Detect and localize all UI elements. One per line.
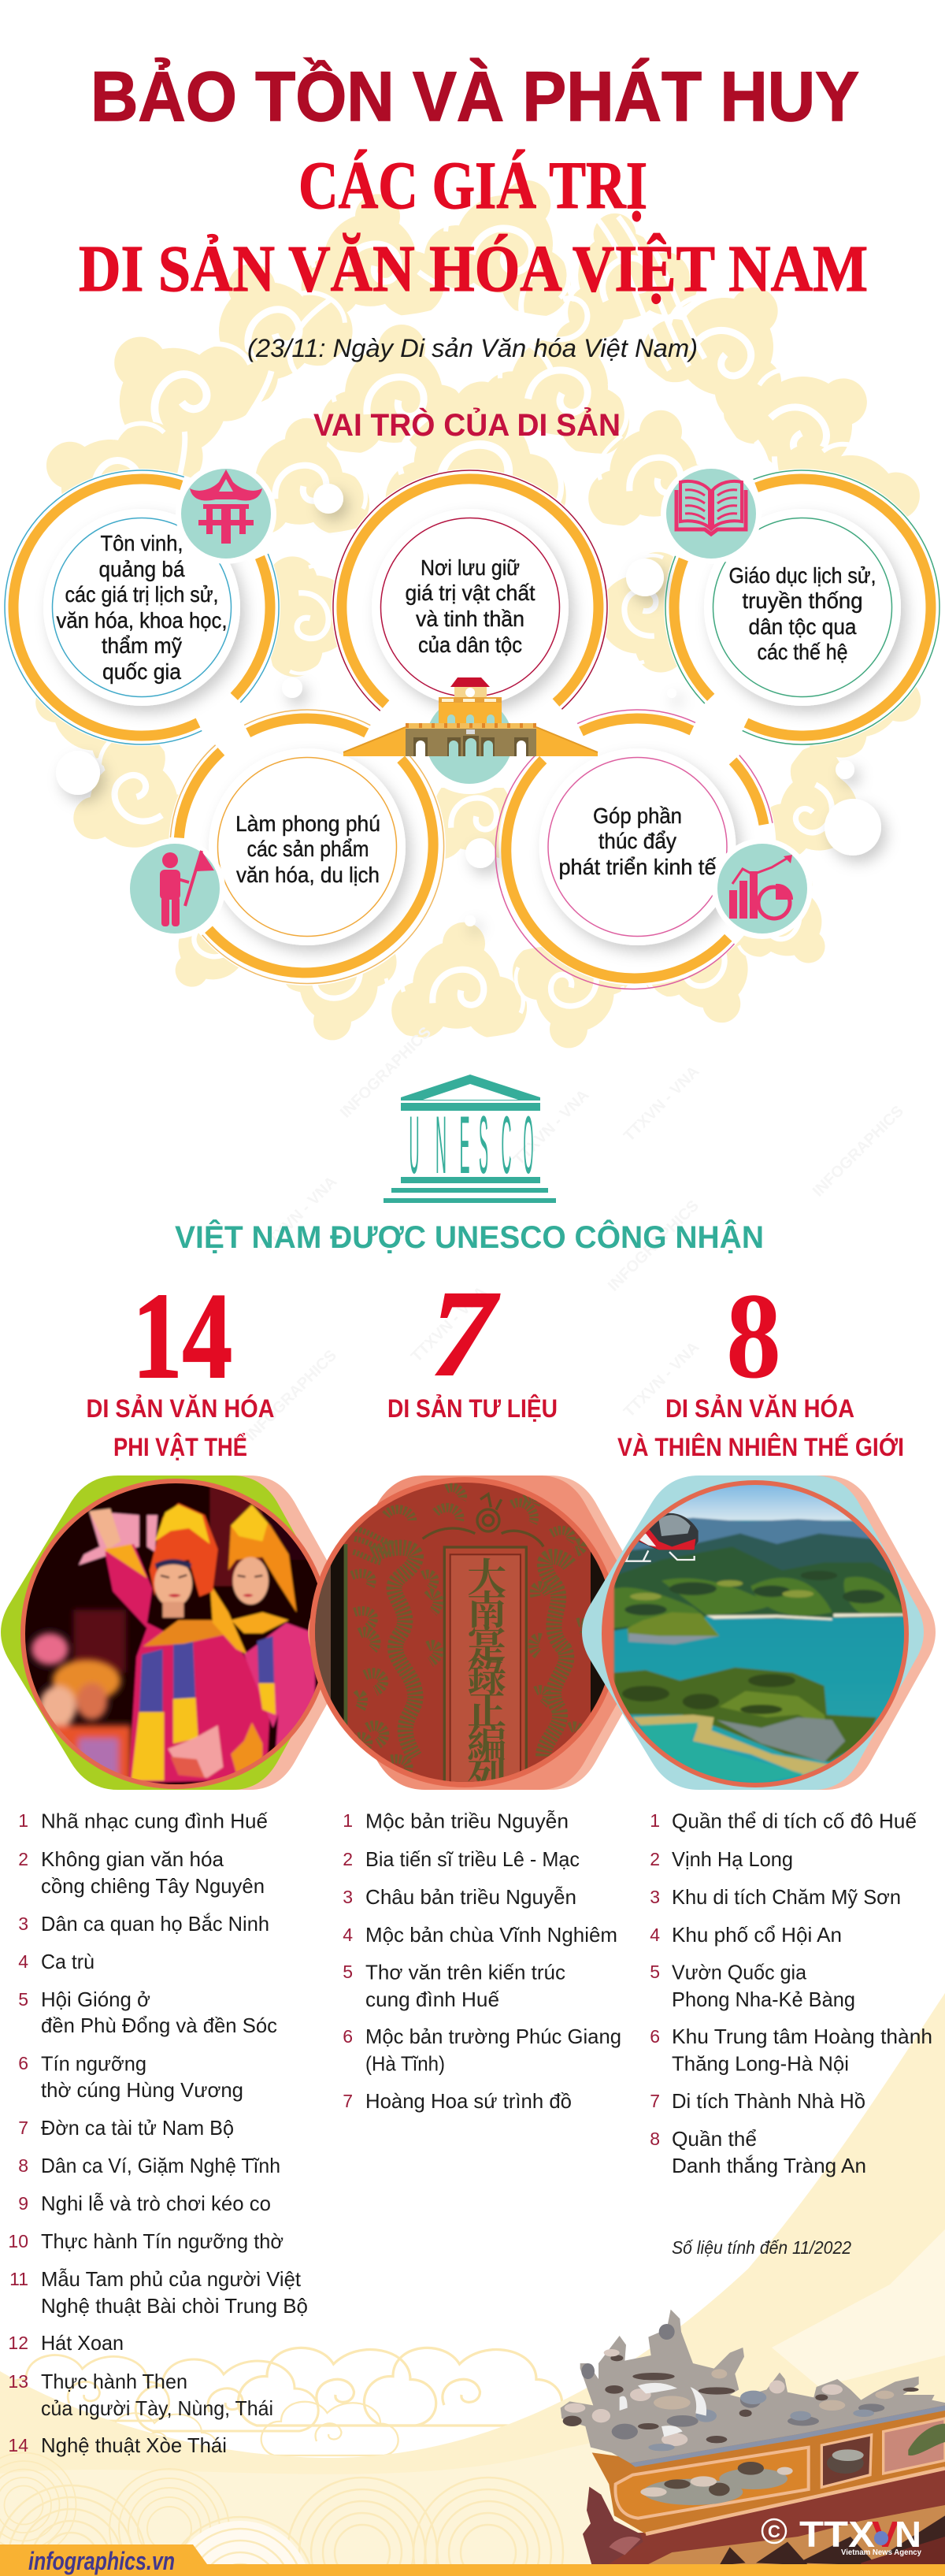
text: role 1: văn hóa, khoa học, [57, 608, 227, 633]
watermarks: TTXVN - VNA [621, 1338, 702, 1421]
list: 14 intangible heritage items: 4 [18, 1951, 28, 1972]
title line 2: CÁC GIÁ TRỊ [298, 147, 647, 223]
UNESCO logo: C [501, 1100, 512, 1191]
text: role 5: thúc đẩy [598, 829, 676, 853]
list: 8 world heritage items: Thăng Long-Hà Nội [672, 2051, 849, 2075]
list: 14 intangible heritage items: Nhã nhạc cung đình Huế [41, 1809, 269, 1832]
icon: growth chart [712, 838, 813, 939]
list: 7 documentary heritage items: 6 [343, 2026, 353, 2047]
list: 14 intangible heritage items [8, 1809, 308, 2457]
list: 14 intangible heritage items: Nghệ thuật Bài chòi Trung Bộ [41, 2294, 308, 2318]
list: 7 documentary heritage items: Thơ văn trên kiến trúc [365, 1960, 565, 1984]
list: 8 world heritage items: 6 [650, 2026, 660, 2047]
watermarks: INFOGRAPHICS [605, 1197, 702, 1295]
list: 8 world heritage items: 5 [650, 1962, 660, 1982]
role 4: enrich products [124, 710, 444, 983]
text: role 5: Góp phần [593, 804, 682, 828]
list: 8 world heritage items: Khu phố cổ Hội An [672, 1923, 842, 1947]
stat: 14 intangible heritages [87, 1268, 274, 1461]
stat: 7 documentary heritages: 7 [431, 1265, 500, 1401]
list: 14 intangible heritage items: Dân ca Ví, Giặm Nghệ Tĩnh [41, 2154, 280, 2177]
subtitle: (23/11: Ngày Di sản Văn hóa Việt Nam) [247, 334, 698, 362]
list: 14 intangible heritage items: 5 [18, 1989, 28, 2010]
list: 8 world heritage items: Quần thể di tích cố đô Huế [672, 1809, 917, 1832]
UNESCO logo: S [479, 1100, 488, 1191]
list: 7 documentary heritage items: 4 [343, 1925, 353, 1945]
text: role 4: các sản phẩm [247, 837, 369, 861]
list: 7 documentary heritage items: 1 [343, 1810, 353, 1831]
list: 7 documentary heritage items: Mộc bản chùa Vĩnh Nghiêm [365, 1923, 617, 1947]
role 1: honour and promote [5, 463, 279, 744]
list: 14 intangible heritage items: 12 [8, 2333, 28, 2353]
bottom background: wave and swoosh [0, 1993, 945, 2576]
text: role 4: văn hóa, du lịch [236, 863, 380, 887]
TTXVN logo: V [872, 2514, 899, 2555]
list: 14 intangible heritage items: 7 [18, 2118, 28, 2138]
list: 14 intangible heritage items: 2 [18, 1849, 28, 1869]
watermarks: INFOGRAPHICS [337, 1024, 435, 1122]
UNESCO logo: U [410, 1100, 419, 1191]
list: 7 documentary heritage items: Mộc bản trường Phúc Giang [365, 2025, 621, 2048]
list: 14 intangible heritage items: 11 [9, 2269, 28, 2289]
list: 8 world heritage items: Khu Trung tâm Hoàng thành [672, 2025, 932, 2048]
text: role 1: thẩm mỹ [102, 633, 182, 658]
list: 8 world heritage items: Quần thể [672, 2127, 757, 2151]
list: 8 world heritage items [650, 1809, 932, 2177]
icon: Hanoi flag tower and citadel gate [343, 677, 598, 784]
section heading: roles of heritage: VAI TRÒ CỦA DI SẢN [313, 406, 621, 443]
UNESCO logo: O [523, 1100, 534, 1191]
stat: 7 documentary heritages: DI SẢN TƯ LIỆU [387, 1394, 558, 1423]
text: role 3 [729, 563, 876, 664]
watermarks [243, 1024, 907, 1445]
stat: 8 world heritages: DI SẢN VĂN HÓA [665, 1394, 854, 1423]
text: role 2: của dân tộc [418, 633, 522, 657]
TTXVN logo: TTX [799, 2514, 875, 2555]
list: 7 documentary heritage items: Châu bản triều Nguyễn [365, 1885, 576, 1909]
list: 7 documentary heritage items: Mộc bản triều Nguyễn [365, 1809, 569, 1832]
stat: 7 documentary heritages [387, 1265, 558, 1423]
list: 14 intangible heritage items: 9 [18, 2193, 28, 2214]
photo panel: documentary heritage woodblock: 南 [467, 1579, 506, 1636]
list: 14 intangible heritage items: Không gian văn hóa [41, 1847, 224, 1871]
role 5: economic development [495, 710, 813, 989]
list: 8 world heritage items: 2 [650, 1849, 660, 1869]
watermarks: TTXVN - VNA [408, 1283, 490, 1366]
list: 7 documentary heritage items [343, 1809, 621, 2113]
UNESCO logo [384, 1075, 556, 1203]
footer bar with site name [0, 2544, 945, 2576]
photo panel: documentary heritage woodblock [308, 1475, 622, 1790]
list: 14 intangible heritage items: Đờn ca tài tử Nam Bộ [41, 2116, 234, 2140]
photo panel: Ha Long Bay natural heritage [582, 1465, 945, 1796]
list: 14 intangible heritage items: Mẫu Tam phủ của người Việt [41, 2267, 302, 2291]
TTXVN logo [762, 2514, 921, 2557]
stat: 14 intangible heritages: 14 [132, 1268, 232, 1404]
stat: 14 intangible heritages: DI SẢN VĂN HÓA [87, 1394, 274, 1423]
background: dragon roundel pattern [20, 154, 943, 1049]
illustration: imperial roof with dragon ornaments [561, 2310, 945, 2566]
watermarks: INFOGRAPHICS [810, 1103, 907, 1201]
list: 14 intangible heritage items: Ca trù [41, 1950, 94, 1973]
text: role 5: phát triển kinh tế [559, 855, 717, 879]
icon: open book [661, 463, 762, 564]
title line 1: BẢO TỒN VÀ PHÁT HUY [91, 57, 859, 135]
list: 8 world heritage items: 8 [650, 2129, 660, 2149]
photo panel: documentary heritage woodblock: 編 [467, 1713, 506, 1770]
watermarks: TTXVN - VNA [258, 1173, 340, 1256]
list: 8 world heritage items: Danh thắng Tràng An [672, 2154, 866, 2177]
text: role 1: quảng bá [99, 557, 185, 581]
list: 14 intangible heritage items: Thực hành Tín ngưỡng thờ [41, 2229, 284, 2253]
TTXVN logo: Vietnam News Agency [841, 2548, 921, 2557]
stat: 14 intangible heritages: PHI VẬT THỂ [113, 1433, 247, 1461]
list: 14 intangible heritage items: 3 [18, 1913, 28, 1934]
role 2: repository of values [333, 470, 607, 711]
text: role 3: truyền thống [742, 588, 863, 613]
list: 14 intangible heritage items: Hát Xoan [41, 2331, 124, 2355]
list: 14 intangible heritage items: 14 [8, 2435, 28, 2455]
list: 14 intangible heritage items: Thực hành Then [41, 2370, 187, 2393]
icon: one-pillar pagoda [176, 463, 276, 564]
list: 7 documentary heritage items: 7 [343, 2091, 353, 2111]
TTXVN logo: C [768, 2522, 780, 2541]
photo panel: intangible heritage dancers [1, 1475, 328, 1790]
text: role 1: quốc gia [102, 659, 181, 684]
list: 8 world heritage items: Khu di tích Chăm Mỹ Sơn [672, 1885, 901, 1909]
photo panel: documentary heritage woodblock: 錄 [467, 1646, 506, 1703]
list: 7 documentary heritage items: 3 [343, 1887, 353, 1907]
list: 8 world heritage items: 4 [650, 1925, 660, 1945]
text: role 3: các thế hệ [758, 640, 847, 664]
photo panel: documentary heritage woodblock: 正 [467, 1679, 506, 1735]
decorative bubbles [56, 484, 881, 926]
text: role 2: Nơi lưu giữ [421, 555, 520, 580]
text: role 2: và tinh thần [416, 607, 524, 631]
text: role 4 [235, 811, 380, 887]
list: 8 world heritage items: Di tích Thành Nhà Hồ [672, 2089, 865, 2113]
list: 14 intangible heritage items: của người Tày, Nùng, Thái [41, 2396, 273, 2420]
list: 14 intangible heritage items: Dân ca quan họ Bắc Ninh [41, 1912, 269, 1936]
text: role 2: giá trị vật chất [405, 581, 536, 605]
list: 14 intangible heritage items: 10 [8, 2231, 28, 2251]
list: 8 world heritage items: 3 [650, 1887, 660, 1907]
stat: 8 world heritages: 8 [726, 1268, 781, 1404]
text: role 5 [559, 804, 717, 879]
text: role 2 [405, 555, 536, 657]
stat: 8 world heritages [617, 1268, 904, 1461]
list: 14 intangible heritage items: cồng chiêng Tây Nguyên [41, 1874, 265, 1898]
list: 7 documentary heritage items: (Hà Tĩnh) [365, 2051, 445, 2075]
list: 8 world heritage items: Vịnh Hạ Long [672, 1847, 793, 1871]
list: 8 world heritage items: Vườn Quốc gia [672, 1960, 807, 1984]
watermarks: INFOGRAPHICS [243, 1347, 340, 1445]
watermarks: TTXVN - VNA [510, 1086, 592, 1169]
data note: Số liệu tính đến 11/2022 [672, 2237, 851, 2258]
list: 8 world heritage items: Phong Nha-Kẻ Bàng [672, 1988, 855, 2011]
photo panel: documentary heritage woodblock: 大 [467, 1546, 506, 1603]
text: role 1: các giá trị lịch sử, [65, 582, 219, 607]
text: role 1: Tôn vinh, [101, 531, 183, 555]
list: 14 intangible heritage items: 6 [18, 2053, 28, 2073]
white discs behind rings [3, 469, 941, 985]
list: 14 intangible heritage items: 13 [8, 2371, 28, 2392]
list: 8 world heritage items: 1 [650, 1810, 660, 1831]
footer bar with site name: infographics.vn [28, 2547, 175, 2575]
TTXVN logo: N [895, 2514, 921, 2555]
text: role 3: Giáo dục lịch sử, [729, 563, 876, 588]
icon: tour guide with flag [124, 838, 225, 939]
list: 14 intangible heritage items: Nghệ thuật Xòe Thái [41, 2433, 227, 2457]
stat: 8 world heritages: VÀ THIÊN NHIÊN THẾ GIỚI [617, 1433, 904, 1461]
photo panel: documentary heritage woodblock: 列 [467, 1746, 506, 1802]
list: 7 documentary heritage items: Bia tiến sĩ triều Lê - Mạc [365, 1847, 580, 1871]
list: 14 intangible heritage items: thờ cúng Hùng Vương [41, 2078, 243, 2102]
text: role 3: dân tộc qua [748, 614, 857, 639]
list: 7 documentary heritage items: Hoàng Hoa sứ trình đồ [365, 2089, 572, 2113]
UNESCO logo: N [435, 1100, 447, 1191]
role 3: history education [661, 463, 939, 744]
list: 8 world heritage items: 7 [650, 2091, 660, 2111]
list: 7 documentary heritage items: 5 [343, 1962, 353, 1982]
list: 14 intangible heritage items: đền Phù Đổng và đền Sóc [41, 2014, 277, 2037]
list: 14 intangible heritage items: 8 [18, 2155, 28, 2176]
helicopter [626, 1513, 699, 1561]
list: 14 intangible heritage items: Tín ngưỡng [41, 2051, 146, 2075]
list: 14 intangible heritage items: Nghi lễ và trò chơi kéo co [41, 2192, 271, 2215]
UNESCO logo: E [460, 1100, 469, 1191]
list: 14 intangible heritage items: Hội Gióng ở [41, 1988, 150, 2011]
section heading: UNESCO recognition: VIỆT NAM ĐƯỢC UNESCO CÔNG NHẬN [175, 1219, 764, 1255]
list: 7 documentary heritage items: cung đình Huế [365, 1988, 500, 2011]
text: role 4: Làm phong phú [235, 811, 380, 836]
list: 7 documentary heritage items: 2 [343, 1849, 353, 1869]
text: role 1 [57, 531, 227, 684]
watermarks: TTXVN - VNA [621, 1063, 702, 1145]
photo panel: documentary heritage woodblock: 寔 [467, 1613, 506, 1670]
list: 14 intangible heritage items: 1 [18, 1810, 28, 1831]
